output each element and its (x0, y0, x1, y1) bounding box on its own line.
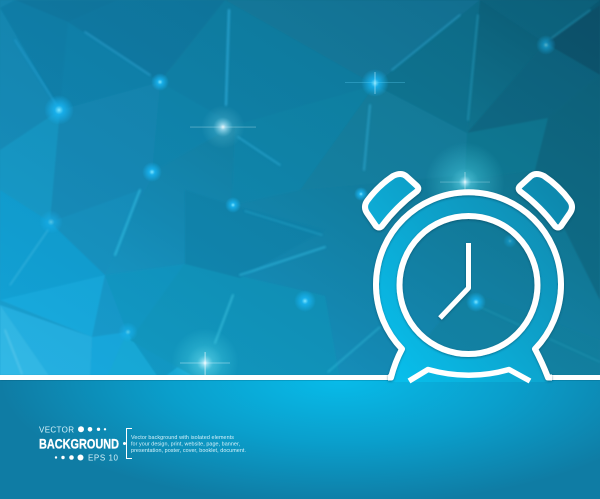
dots lower row (55, 454, 84, 460)
logo: vector background (39, 426, 132, 462)
description text: for your design, print, website, page, banner, (131, 442, 240, 448)
glowing star points (39, 35, 556, 396)
description text: presentation, poster, cover, booklet, document. (131, 448, 246, 454)
clock feet arc (409, 370, 530, 381)
description text: Vector background with isolated elements (131, 435, 234, 441)
lower band (0, 380, 600, 499)
left bell (365, 174, 418, 228)
label: background: BACKGROUND (39, 436, 119, 452)
dots upper row (78, 426, 106, 432)
light streaks (5, 10, 600, 374)
clock outer outline (376, 192, 561, 378)
label: eps 10: EPS 10 (88, 454, 119, 462)
bracket (126, 428, 132, 458)
horizontal white line, left segment (0, 375, 391, 380)
clock inner circle (400, 216, 538, 354)
label: vector: VECTOR (39, 426, 74, 434)
bracket pointer (123, 442, 126, 445)
icon: alarm clock (365, 174, 572, 382)
clock hands (440, 243, 468, 318)
polygon background (0, 0, 600, 380)
clock body ring (376, 192, 561, 382)
horizontal white line, right segment (548, 375, 600, 380)
description text (131, 435, 246, 454)
right bell (519, 174, 572, 228)
